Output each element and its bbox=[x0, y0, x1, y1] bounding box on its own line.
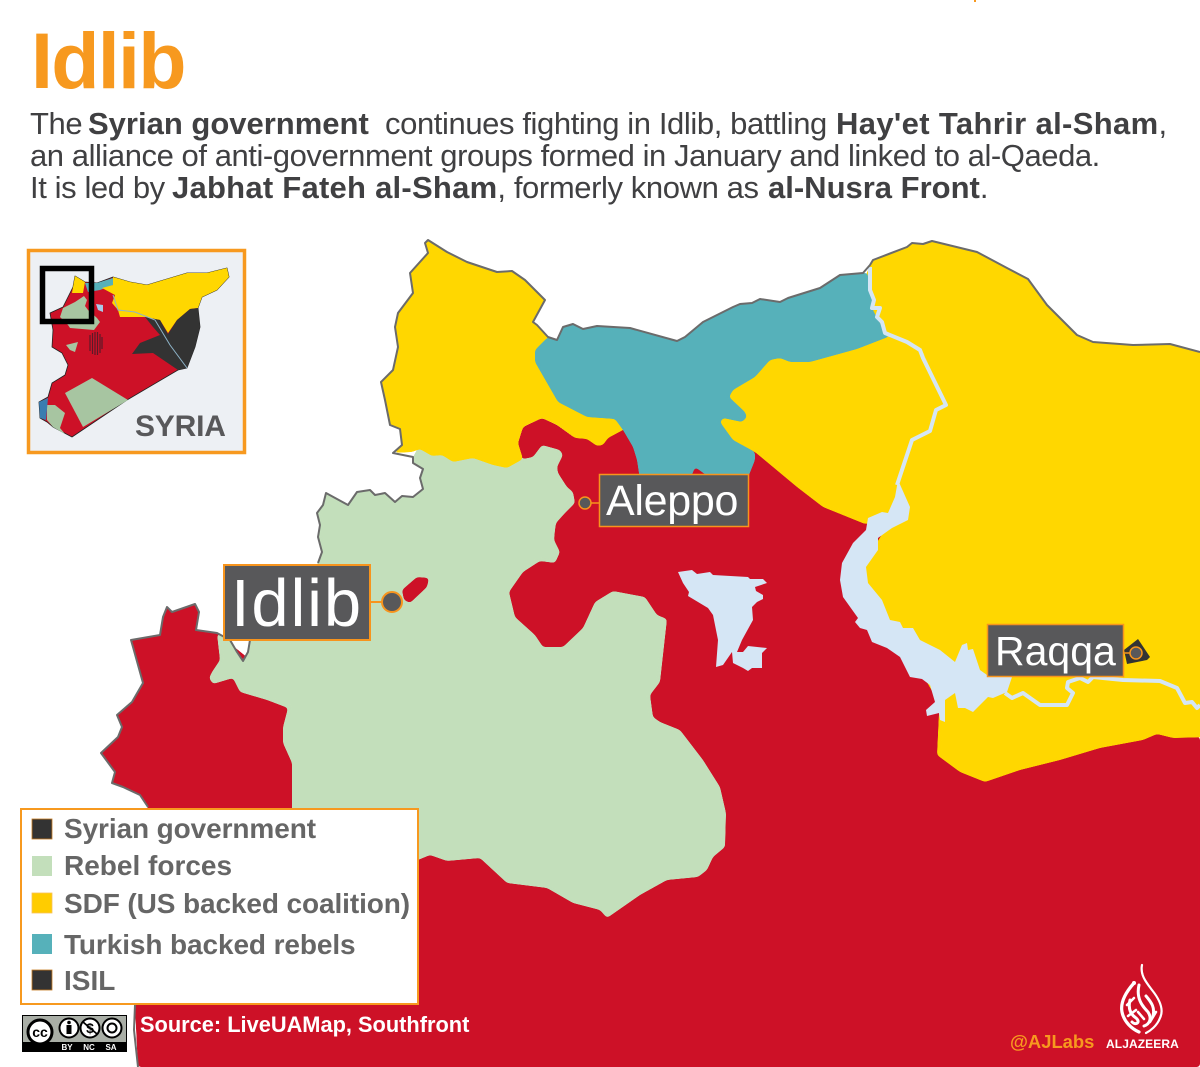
region: SDF east bbox=[860, 241, 1200, 782]
label: Raqqa: Raqqa bbox=[995, 628, 1116, 674]
orange tick bbox=[974, 0, 976, 2]
region: SDF west bbox=[381, 240, 640, 468]
intro text: It is led by bbox=[30, 170, 166, 205]
intro text: continues fighting in Idlib, battling bbox=[385, 106, 827, 141]
intro text: Jabhat Fateh al-Sham bbox=[172, 170, 497, 205]
legend: ISIL bbox=[32, 965, 115, 996]
legend: SDF: SDF (US backed coalition) bbox=[64, 888, 410, 919]
icon: creative commons badge: SA bbox=[105, 1043, 117, 1052]
lake: Jabbul bbox=[678, 570, 767, 671]
legend: Syrian government: Syrian government bbox=[64, 813, 316, 844]
border: west coast bbox=[101, 604, 250, 807]
inset: hatched area bbox=[88, 332, 103, 355]
legend: ISIL: ISIL bbox=[64, 965, 115, 996]
inset: ISIL bbox=[132, 308, 200, 370]
icon: creative commons badge bbox=[22, 1015, 127, 1052]
region: Syrian government bbox=[101, 400, 1200, 1067]
credit: AJLabs: @AJLabs bbox=[1010, 1031, 1094, 1052]
inset: country name: SYRIA bbox=[135, 410, 226, 443]
river: Euphrates lake bbox=[840, 480, 1012, 722]
inset: Turkish backed rebels bbox=[85, 278, 113, 292]
inset: locator square bbox=[42, 268, 92, 322]
legend: Rebel forces: Rebel forces bbox=[64, 850, 232, 881]
border: south west bbox=[134, 1005, 138, 1067]
label: Aleppo: Aleppo bbox=[606, 477, 738, 525]
label: Raqqa bbox=[988, 624, 1150, 676]
inset: river bbox=[113, 295, 187, 368]
river: east branch bbox=[1005, 677, 1200, 708]
wordmark: Al Jazeera: ALJAZEERA bbox=[1106, 1037, 1179, 1051]
intro text: , bbox=[1159, 106, 1167, 141]
intro text: . bbox=[980, 170, 988, 205]
icon: creative commons badge: cc bbox=[32, 1024, 48, 1040]
title: Idlib bbox=[31, 16, 185, 105]
intro text: al-Nusra Front bbox=[768, 170, 980, 205]
icon: Al Jazeera logo bbox=[1122, 965, 1162, 1033]
intro text: Hay'et Tahrir al-Sham bbox=[836, 106, 1159, 141]
icon: creative commons badge: NC bbox=[83, 1043, 95, 1052]
region: rebel forces bbox=[209, 435, 726, 918]
inset: rebel south-west bbox=[47, 405, 65, 434]
inset: rebel central patch bbox=[66, 342, 78, 352]
river: north branch bbox=[870, 267, 946, 485]
icon: creative commons badge: BY bbox=[61, 1043, 73, 1052]
intro text: The bbox=[30, 106, 82, 141]
inset: Syria outline bbox=[39, 268, 229, 437]
inset: Golan bbox=[39, 398, 48, 420]
intro text bbox=[30, 106, 1167, 205]
intro text: Syrian government bbox=[88, 106, 369, 141]
icon: creative commons badge: $ bbox=[86, 1020, 94, 1036]
label: Idlib: Idlib bbox=[231, 566, 363, 641]
inset: rebel south bbox=[65, 378, 128, 427]
legend: Turkish backed rebels: Turkish backed rebels bbox=[64, 929, 356, 960]
inset: SDF north-east bbox=[102, 268, 229, 333]
intro text: an alliance of anti-government groups formed in January and linked to al-Qaeda. bbox=[30, 138, 1100, 173]
inset: water bbox=[96, 304, 103, 312]
inset: SDF west bbox=[72, 276, 85, 293]
inset: rebel north bbox=[60, 296, 100, 330]
intro text: , formerly known as bbox=[497, 170, 759, 205]
source: Source: LiveUAMap, Southfront bbox=[140, 1012, 469, 1037]
legend bbox=[21, 809, 418, 1004]
inset map: Syria bbox=[28, 250, 244, 452]
region: SDF central bbox=[700, 320, 946, 524]
map bbox=[101, 240, 1200, 1067]
border: north bbox=[317, 240, 1200, 563]
region: Turkish backed rebels bbox=[535, 273, 890, 480]
region: small government pocket bbox=[402, 577, 429, 603]
